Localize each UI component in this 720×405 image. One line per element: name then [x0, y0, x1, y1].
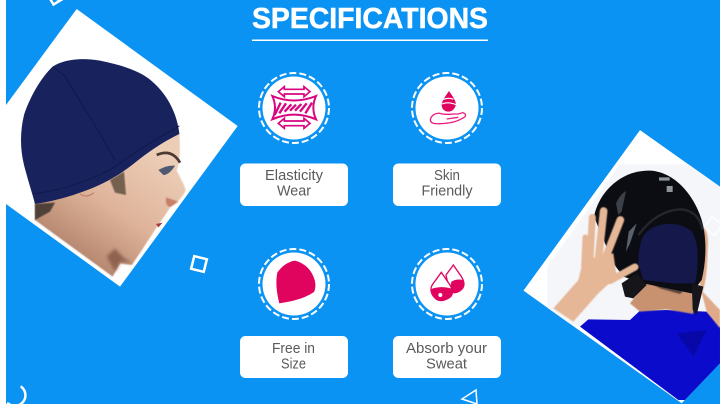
label box — [240, 164, 348, 206]
right helmet strap — [692, 283, 703, 315]
eye — [158, 166, 175, 175]
spec item: skin friendly — [393, 73, 501, 206]
spec item: elasticity wear — [240, 73, 348, 206]
badge circle — [259, 73, 329, 143]
label box — [393, 336, 501, 378]
faint square in photo — [704, 217, 720, 235]
panel: right photo of man putting on helmet — [523, 130, 720, 403]
icon: drop over open hand — [430, 91, 466, 124]
helmet side highlight — [626, 223, 637, 252]
title: SPECIFICATIONS — [252, 3, 488, 35]
shirt collar shadow — [677, 330, 707, 357]
nostril — [166, 197, 178, 207]
right arm — [700, 227, 720, 328]
navy skull cap — [21, 59, 179, 204]
sideburn — [110, 172, 126, 195]
title underline — [252, 40, 488, 41]
label box — [240, 336, 348, 378]
black helmet — [594, 171, 705, 293]
decoration: small tilted square — [191, 256, 207, 272]
hair at nape — [35, 203, 55, 220]
helmet logo marks — [659, 177, 673, 192]
badge circle — [412, 249, 482, 319]
ear — [80, 193, 94, 196]
badge circle — [412, 73, 482, 143]
badge circle — [259, 249, 329, 319]
label box: Sweat — [426, 356, 467, 372]
jaw shadow — [107, 248, 133, 272]
label box — [393, 164, 501, 206]
label box: Absorb your — [406, 341, 487, 357]
helmet grey vent — [616, 191, 626, 215]
hairline — [654, 286, 684, 294]
icon: cap silhouette — [276, 261, 315, 303]
icon: stretching fabric with arrows — [272, 87, 316, 128]
navy cap under helmet — [638, 224, 698, 283]
face and neck — [35, 132, 186, 277]
label box: Wear — [277, 184, 311, 200]
eyebrow — [157, 153, 180, 163]
decoration: top-left square fragment — [49, 0, 61, 4]
blue shirt — [580, 310, 720, 400]
panel: left photo of man wearing cap — [6, 9, 238, 287]
helmet rim — [638, 209, 703, 235]
white diamond backing — [6, 9, 238, 287]
label box: Size — [281, 356, 306, 372]
decoration: bottom-left arc — [8, 387, 25, 405]
label box: Elasticity — [265, 168, 324, 184]
left helmet strap — [622, 273, 647, 298]
neck — [630, 282, 693, 314]
icon: two sweat drops — [431, 265, 464, 301]
spec item: absorb your sweat — [393, 249, 501, 378]
label box: Skin — [434, 168, 460, 184]
off-white photo background — [547, 164, 720, 326]
decoration: bottom triangle — [462, 390, 477, 404]
label box: Friendly — [422, 184, 473, 200]
cap seam — [33, 67, 179, 194]
spec item: free in size — [240, 249, 348, 378]
label box: Free in — [272, 341, 315, 357]
white diamond backing — [523, 130, 720, 403]
lips — [156, 223, 163, 227]
left hand and forearm — [553, 211, 635, 322]
